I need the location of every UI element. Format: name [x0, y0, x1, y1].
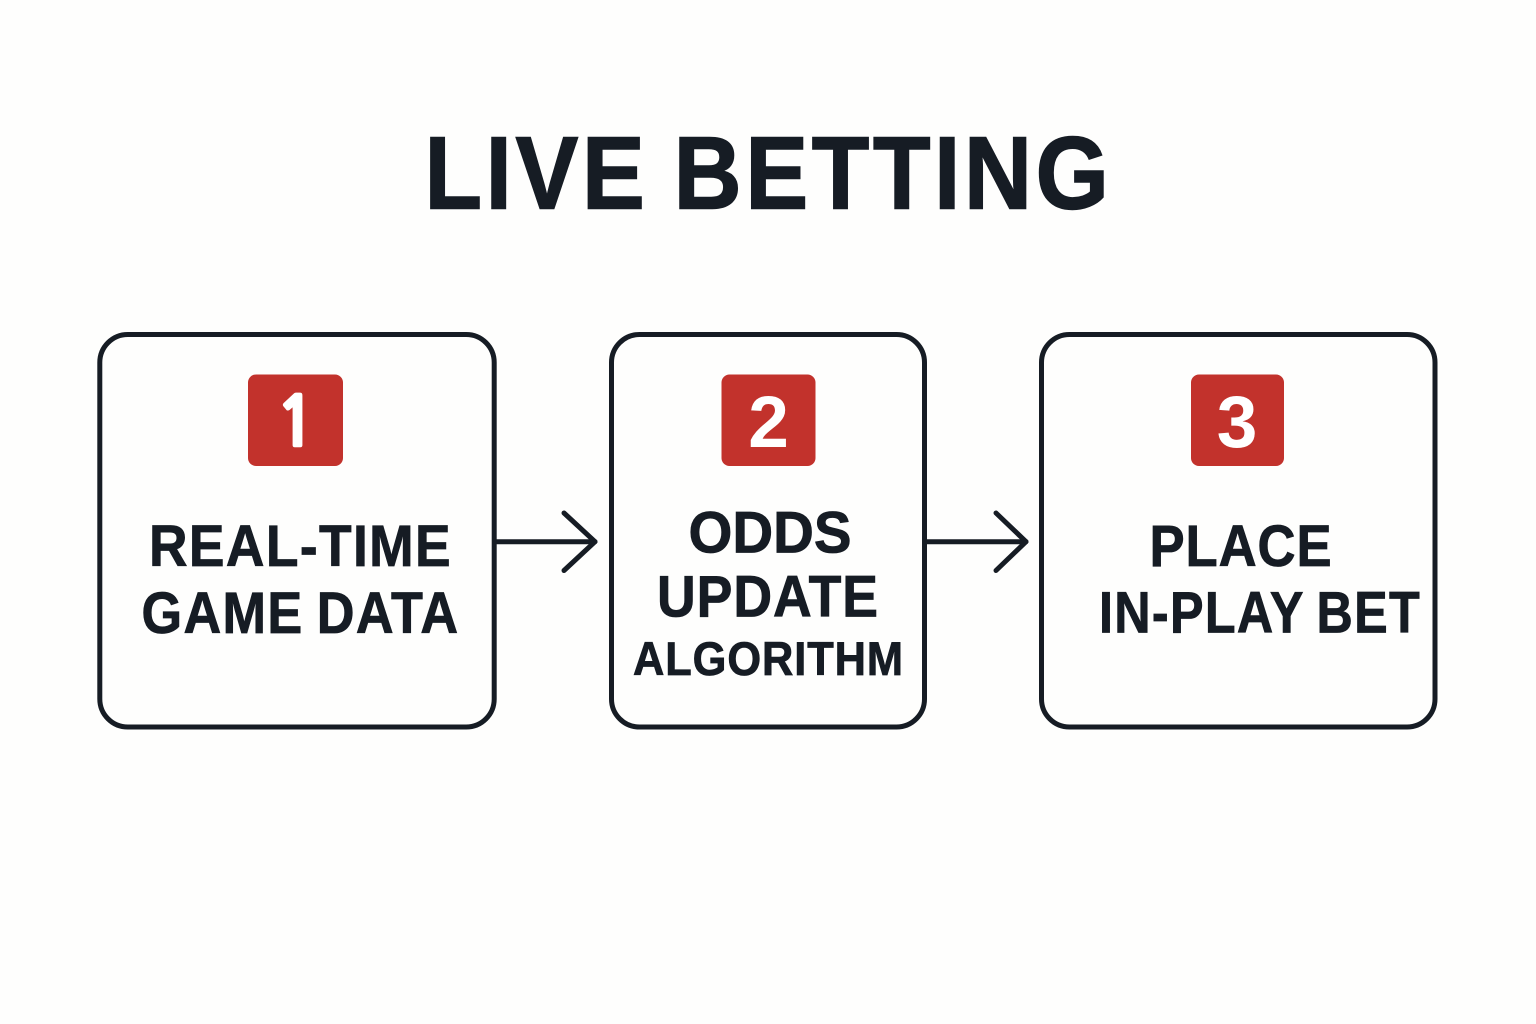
step 3 label — [1099, 514, 1421, 646]
arrow: step 2 to step 3 — [927, 513, 1026, 570]
panel: step 2 — [612, 334, 924, 727]
icon: number 3 badge: 3 — [1217, 382, 1257, 463]
icon: number 2 badge — [722, 374, 816, 466]
title: LIVE BETTING — [424, 116, 1112, 230]
icon: number 3 badge — [1191, 374, 1284, 466]
step 3 label: IN-PLAY BET — [1099, 580, 1421, 646]
step 1 label — [142, 514, 460, 646]
step 2 label — [633, 500, 904, 685]
icon: number 2 badge: 2 — [748, 382, 789, 463]
icon: number 1 badge: 1 — [275, 390, 317, 457]
step 1 label: REAL-TIME — [149, 514, 452, 579]
panel: step 1 — [100, 334, 494, 727]
step 2 label: UPDATE — [657, 564, 879, 630]
icon: number 1 badge — [248, 374, 343, 466]
step 2 label: ALGORITHM — [633, 632, 904, 685]
step 1 label: GAME DATA — [142, 581, 460, 646]
arrow: step 1 to step 2 — [496, 513, 595, 570]
panel: step 3 — [1042, 334, 1435, 727]
step 3 label: PLACE — [1150, 514, 1332, 579]
step 2 label: ODDS — [688, 500, 852, 566]
